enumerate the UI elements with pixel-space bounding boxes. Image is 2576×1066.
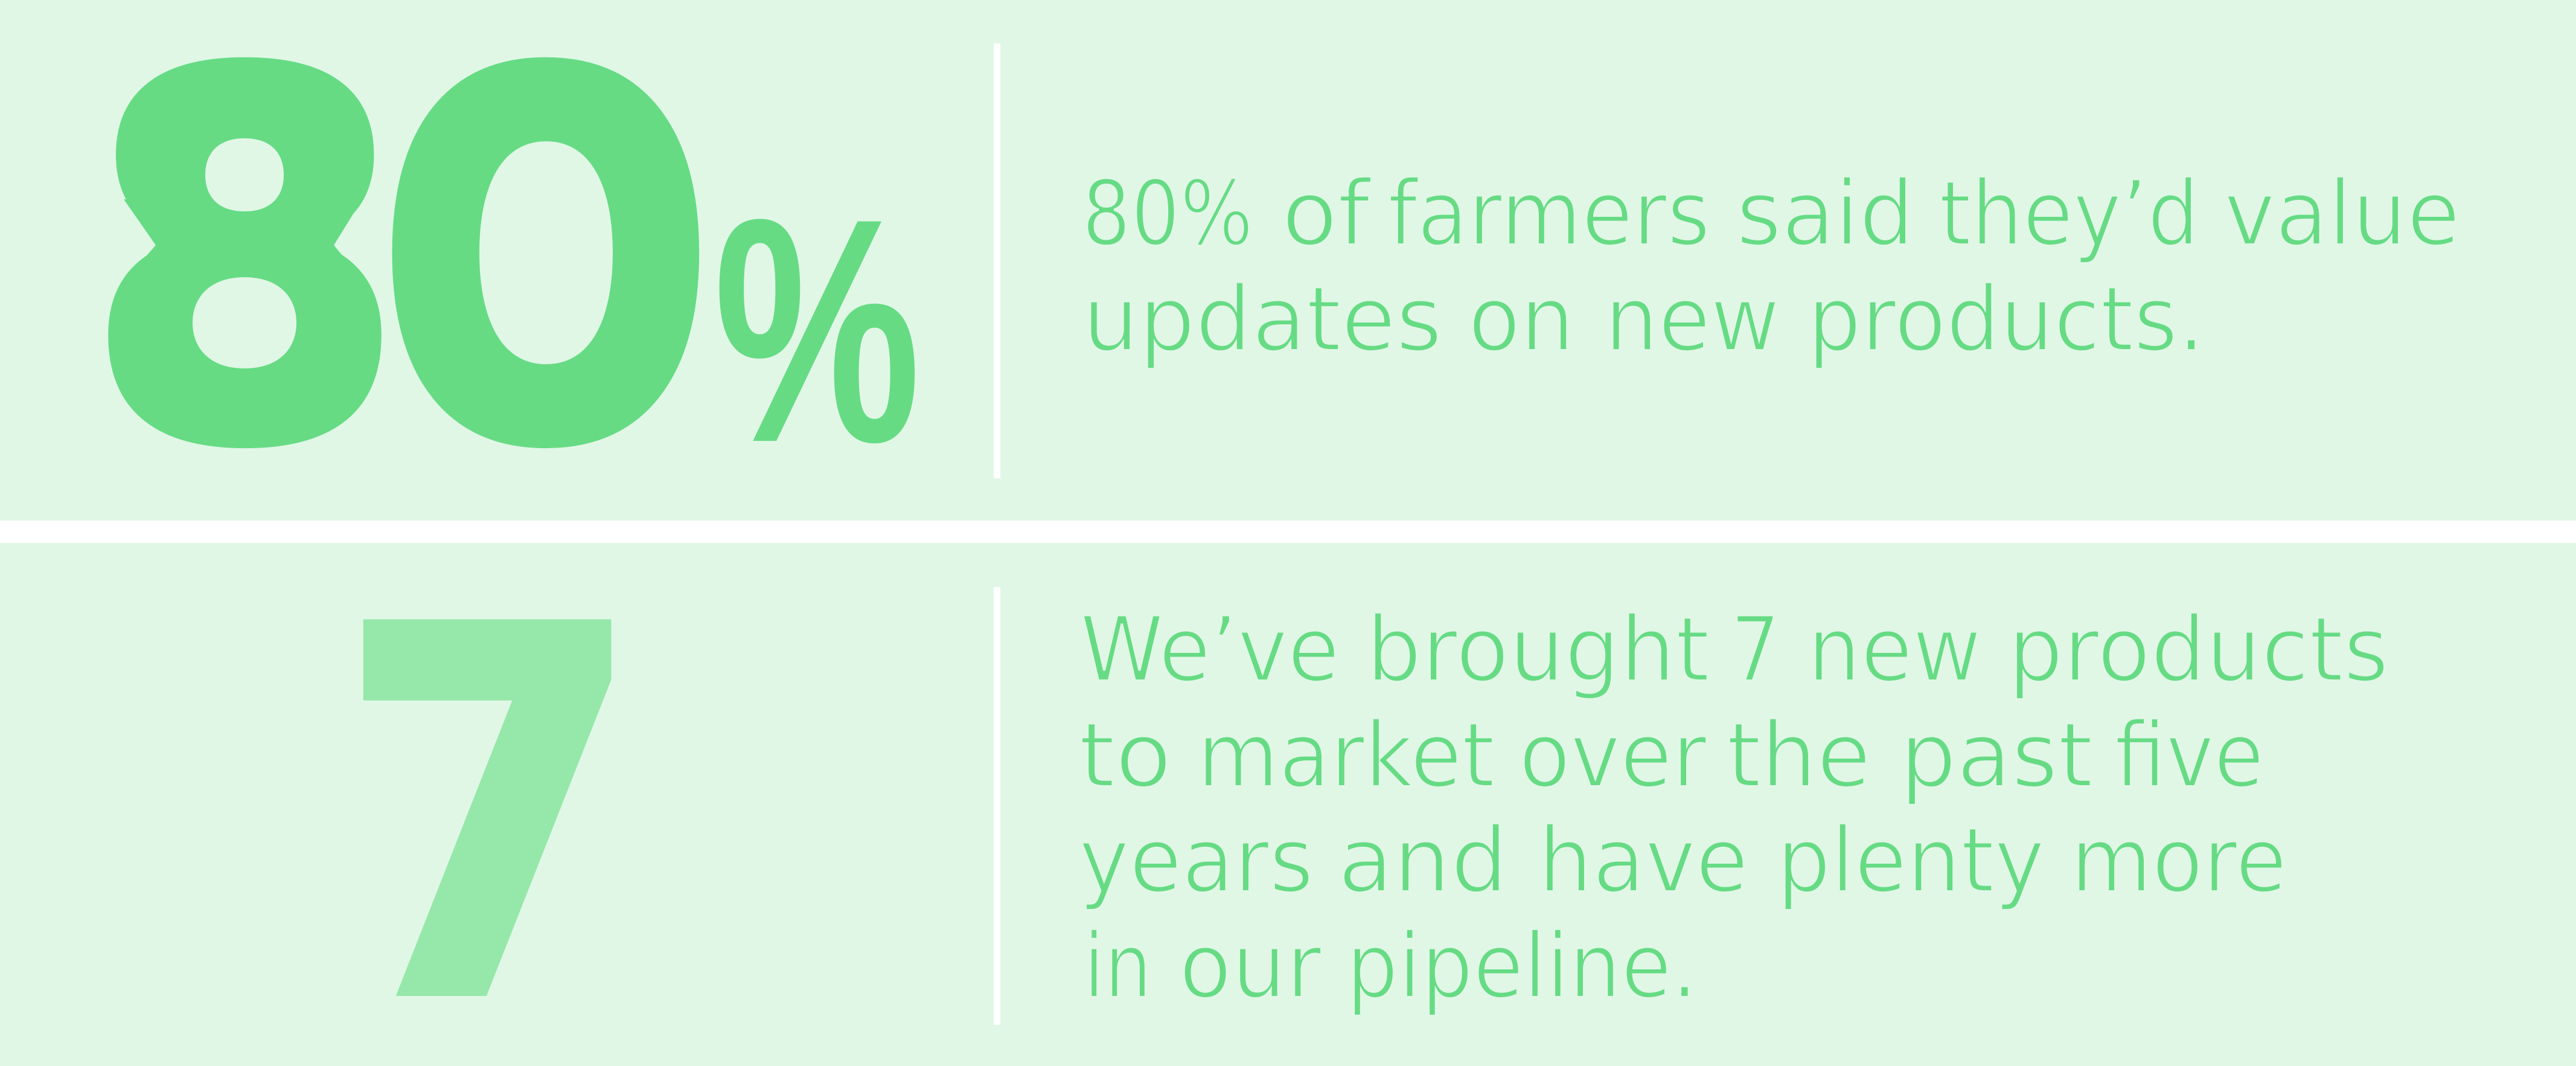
- text block: 7 new products: market: [1197, 704, 1495, 808]
- big stat: 80%: [79, 0, 921, 564]
- text block: 7 new products: 7: [1730, 598, 1780, 702]
- text block: 7 new products: five: [2115, 704, 2264, 808]
- text block: 7 new products: plenty: [1777, 809, 2045, 913]
- text block: 7 new products: new: [1807, 598, 1981, 702]
- text block: 7 new products: have: [1538, 809, 1748, 913]
- text block: 80% of farmers: updates: [1082, 268, 1442, 372]
- text block: 7 new products: products: [2008, 598, 2389, 702]
- text block: 7 new products: to: [1079, 704, 1172, 808]
- text block: 80% of farmers: farmers: [1388, 162, 1710, 266]
- text block: 80% of farmers: 80%: [1082, 162, 1253, 266]
- text block: 7 new products: over: [1519, 704, 1707, 808]
- text block: 80% of farmers: value: [2224, 162, 2460, 266]
- text block: 7 new products: in: [1084, 914, 1152, 1019]
- text block: 7 new products: the: [1727, 704, 1871, 808]
- text block: 7 new products: past: [1900, 704, 2093, 808]
- text block: 7 new products: our: [1179, 914, 1322, 1019]
- big stat: 80%: %: [714, 153, 921, 509]
- text block: 80% of farmers: they’d: [1939, 162, 2199, 266]
- text block: 80% of farmers: of: [1282, 162, 1372, 266]
- text block: 7 new products: years: [1079, 809, 1314, 913]
- text block: 80% of farmers: products.: [1807, 268, 2205, 372]
- text block: 80% of farmers: on: [1468, 268, 1574, 372]
- text block: 7 new products: We’ve: [1080, 598, 1340, 702]
- text block: 80% of farmers: [1082, 162, 2460, 372]
- text block: 7 new products: more: [2071, 809, 2287, 913]
- text block: 80% of farmers: said: [1736, 162, 1914, 266]
- text block: 7 new products: [1079, 598, 2389, 1019]
- text block: 7 new products: pipeline.: [1346, 914, 1698, 1019]
- text block: 7 new products: and: [1338, 809, 1508, 913]
- text block: 7 new products: brought: [1366, 598, 1710, 702]
- text block: 80% of farmers: new: [1605, 268, 1780, 372]
